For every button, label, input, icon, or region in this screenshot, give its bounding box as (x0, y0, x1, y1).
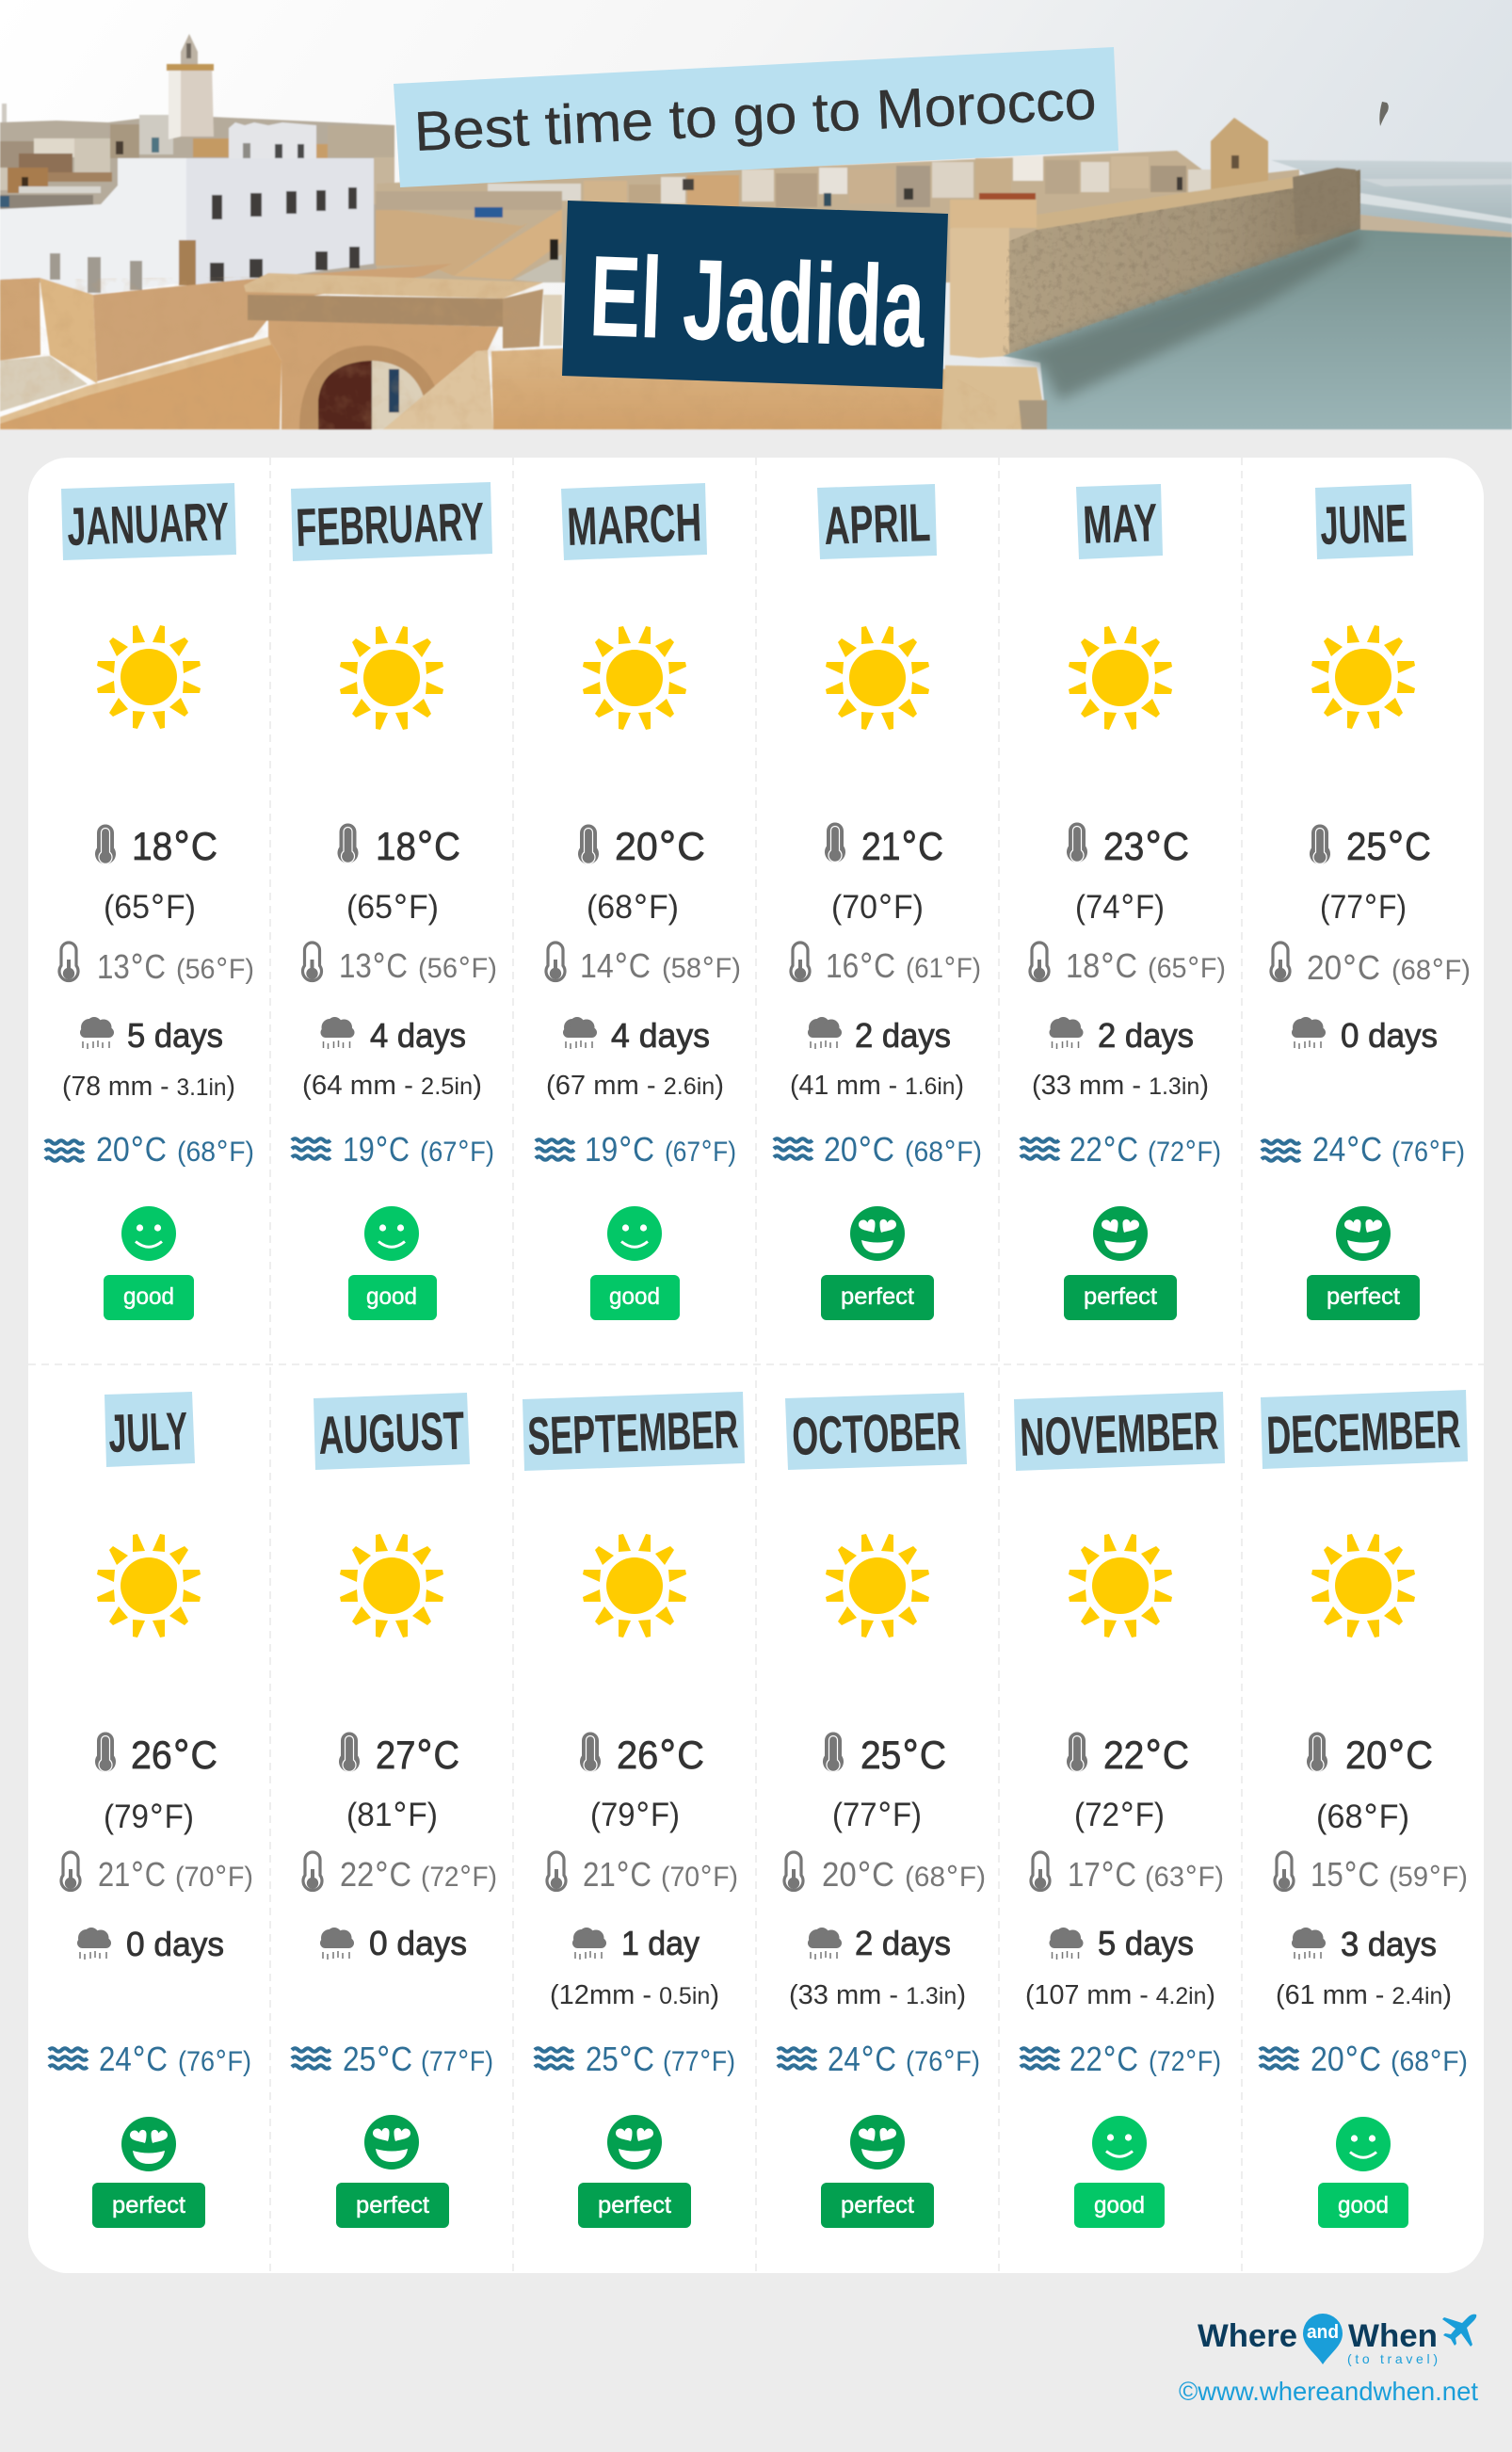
sea temperature: 22°C (1070, 1130, 1138, 1170)
rain days: 3 days (1341, 1925, 1437, 1963)
low temperature: 13°C (97, 947, 166, 987)
low temperature: 18°C (1066, 946, 1137, 986)
rating badge: perfect (598, 2192, 671, 2218)
column: June (1262, 484, 1471, 1320)
rating badge: perfect (841, 2192, 914, 2218)
column: March (536, 483, 741, 1320)
high temperature: 20°C (615, 823, 705, 869)
rain days: 0 days (126, 1925, 224, 1963)
rating badge: perfect (112, 2192, 185, 2218)
high temperature: 26°C (131, 1732, 217, 1778)
rainfall: (33 mm - 1.3in) (1032, 1071, 1209, 1101)
header photo: El Jadida fortress and sea (0, 0, 1512, 429)
icon: sun (1069, 1534, 1172, 1637)
low fahrenheit: (65°F) (1148, 952, 1226, 985)
rainfall: (12mm - 0.5in) (550, 1980, 719, 2010)
month label (105, 1392, 195, 1467)
low fahrenheit: (70°F) (175, 1861, 253, 1894)
icon: thermometer high (1307, 1733, 1327, 1772)
month label (523, 1392, 745, 1471)
month label: NOVEMBER (1019, 1401, 1219, 1468)
icon: thermometer high (1067, 823, 1087, 863)
sea fahrenheit: (76°F) (906, 2045, 980, 2078)
icon: sun (826, 1534, 929, 1637)
high temperature: 18°C (376, 823, 460, 869)
rain days: 1 day (621, 1924, 700, 1962)
icon: waves (535, 2048, 573, 2069)
icon: rain cloud (1292, 1017, 1326, 1049)
icon: sun (1069, 626, 1172, 730)
month label (1014, 1392, 1225, 1471)
icon: sun (97, 1534, 201, 1637)
column: December (1260, 1390, 1468, 2228)
month label: MAY (1082, 492, 1158, 556)
column: October (778, 1393, 986, 2228)
month label (817, 484, 937, 559)
icon: thermometer low (1275, 1852, 1294, 1891)
rainfall: (78 mm - 3.1in) (62, 1072, 235, 1102)
icon: thermometer high (825, 823, 845, 863)
high temperature: 26°C (617, 1732, 704, 1778)
icon: waves (292, 2048, 330, 2069)
sea temperature: 24°C (1312, 1130, 1382, 1170)
rain days: 2 days (855, 1016, 951, 1055)
low fahrenheit: (68°F) (1391, 954, 1471, 987)
icon: waves (45, 1140, 84, 1161)
low fahrenheit: (63°F) (1145, 1861, 1224, 1894)
icon: sun (826, 626, 929, 730)
icon: rain cloud (572, 1928, 606, 1960)
icon: waves (774, 1138, 812, 1159)
month label: SEPTEMBER (526, 1399, 739, 1467)
low fahrenheit: (72°F) (421, 1861, 497, 1894)
sea fahrenheit: (67°F) (665, 1136, 736, 1169)
icon: waves (778, 2048, 816, 2069)
sea temperature: 24°C (99, 2040, 168, 2079)
low fahrenheit: (59°F) (1389, 1861, 1468, 1894)
icon: thermometer high (95, 825, 116, 864)
high temperature: 27°C (376, 1732, 459, 1778)
icon: thermometer low (547, 1852, 566, 1891)
rating badge (821, 1275, 934, 1320)
high temperature: 23°C (1103, 823, 1189, 869)
month label: APRIL (823, 492, 931, 557)
rating badge: perfect (356, 2192, 429, 2218)
sea fahrenheit: (76°F) (178, 2045, 251, 2078)
low fahrenheit: (56°F) (176, 953, 254, 986)
icon: good smiley (607, 1206, 662, 1261)
high temperature fahrenheit: (68°F) (587, 889, 679, 927)
rainfall: (107 mm - 4.2in) (1025, 1980, 1215, 2010)
icon: rain cloud (77, 1928, 111, 1960)
month label (785, 1393, 967, 1470)
low fahrenheit: (56°F) (418, 952, 497, 985)
sea fahrenheit: (76°F) (1391, 1136, 1465, 1169)
high temperature fahrenheit: (77°F) (1320, 889, 1407, 927)
icon: thermometer low (1271, 943, 1290, 981)
month label: AUGUST (317, 1401, 465, 1466)
icon: map pin (1303, 2314, 1343, 2364)
icon: perfect smiley (850, 1206, 905, 1261)
high temperature fahrenheit: (79°F) (104, 1799, 194, 1836)
month label (61, 483, 236, 560)
rating badge (1318, 2183, 1408, 2228)
icon: thermometer low (546, 943, 565, 981)
icon: rain cloud (1049, 1017, 1083, 1049)
icon: waves (536, 1139, 574, 1160)
low fahrenheit: (58°F) (662, 952, 741, 985)
rating badge (336, 2183, 449, 2228)
icon: thermometer low (303, 1852, 322, 1891)
icon: thermometer high (823, 1733, 844, 1772)
rain days: 4 days (370, 1016, 466, 1055)
rain days: 5 days (127, 1016, 223, 1055)
icon: sun (1311, 1534, 1415, 1637)
title text: El Jadida (587, 232, 927, 371)
icon: plane (1442, 2315, 1476, 2347)
low temperature: 15°C (1311, 1855, 1379, 1895)
photo texture: stone (1003, 169, 1360, 356)
icon: waves (292, 1138, 330, 1159)
icon: rain cloud (563, 1017, 597, 1049)
rating badge: good (1338, 2192, 1389, 2218)
column: May (1021, 484, 1226, 1320)
sea temperature: 25°C (343, 2040, 412, 2079)
month label: JANUARY (66, 492, 230, 557)
subtitle banner (394, 47, 1118, 187)
footer logo: Where and When (1198, 2314, 1476, 2366)
photo texture: plaster (0, 276, 1047, 429)
month label (1076, 484, 1163, 559)
icon: rain cloud (1292, 1928, 1326, 1960)
high temperature fahrenheit: (70°F) (831, 889, 924, 927)
icon: rain cloud (808, 1928, 842, 1960)
rating badge: good (123, 1283, 174, 1310)
icon: waves (1262, 1140, 1300, 1161)
high temperature: 25°C (1346, 823, 1431, 869)
rating badge (348, 1275, 437, 1320)
icon: sun (340, 1534, 443, 1637)
rating badge (821, 2183, 934, 2228)
high temperature: 21°C (861, 823, 943, 869)
sea fahrenheit: (77°F) (421, 2045, 493, 2078)
icon: rain cloud (808, 1017, 842, 1049)
sea fahrenheit: (67°F) (420, 1136, 494, 1169)
sea temperature: 24°C (828, 2040, 896, 2079)
month label: MARCH (566, 492, 702, 557)
icon: good smiley (121, 1206, 176, 1261)
high temperature fahrenheit: (65°F) (346, 889, 439, 927)
icon: rain cloud (80, 1017, 114, 1049)
icon: thermometer high (580, 1733, 601, 1772)
icon: waves (49, 2048, 88, 2069)
icon: perfect smiley (121, 2117, 176, 2171)
icon: thermometer high (339, 1733, 360, 1772)
low temperature: 17°C (1068, 1855, 1136, 1895)
high temperature: 25°C (861, 1732, 946, 1778)
rating badge (1074, 2183, 1165, 2228)
sea fahrenheit: (72°F) (1148, 1136, 1221, 1169)
icon: good smiley (1336, 2117, 1391, 2171)
icon: thermometer low (1031, 1852, 1050, 1891)
rating badge: good (1094, 2192, 1145, 2218)
rainfall: (33 mm - 1.3in) (789, 1980, 966, 2010)
footer logo: Where and When: Where (1198, 2318, 1297, 2354)
low temperature: 22°C (340, 1855, 411, 1895)
icon: thermometer high (1067, 1733, 1087, 1772)
rating badge (1307, 1275, 1420, 1320)
month label: JULY (107, 1401, 188, 1464)
icon: rain cloud (320, 1928, 354, 1960)
rating badge: perfect (1084, 1283, 1157, 1310)
low temperature: 21°C (98, 1855, 166, 1895)
month label: OCTOBER (791, 1401, 961, 1467)
column: February (291, 482, 497, 1320)
icon: map pin: and (1307, 2322, 1339, 2343)
low temperature: 16°C (826, 946, 895, 986)
low fahrenheit: (70°F) (661, 1861, 738, 1894)
icon: waves (1021, 2048, 1059, 2069)
month label (561, 483, 707, 560)
low fahrenheit: (61°F) (906, 952, 981, 985)
high temperature: 22°C (1103, 1732, 1189, 1778)
icon: thermometer low (303, 943, 322, 981)
icon: thermometer low (61, 1852, 80, 1891)
icon: sun (583, 626, 686, 730)
low temperature: 20°C (1307, 948, 1380, 988)
month label (314, 1393, 470, 1470)
rainfall: (41 mm - 1.6in) (790, 1071, 964, 1101)
icon: thermometer high (337, 823, 358, 863)
icon: sun (1311, 625, 1415, 729)
icon: thermometer high (95, 1733, 116, 1772)
month label: FEBRUARY (295, 492, 485, 558)
icon: perfect smiley (850, 2115, 905, 2170)
icon: sun (583, 1534, 686, 1637)
sea fahrenheit: (68°F) (177, 1136, 254, 1169)
sea fahrenheit: (68°F) (1391, 2045, 1468, 2078)
icon: thermometer high (1310, 825, 1330, 864)
column: July (49, 1392, 253, 2228)
rain days: 0 days (1341, 1016, 1438, 1055)
icon: sun (340, 626, 443, 730)
icon: perfect smiley (1336, 1206, 1391, 1261)
rating badge (104, 1275, 194, 1320)
icon: waves (1260, 2048, 1298, 2069)
low temperature: 14°C (580, 946, 651, 986)
icon: thermometer high (578, 825, 599, 864)
icon: thermometer low (59, 943, 78, 981)
rating badge (92, 2183, 205, 2228)
rating badge (1064, 1275, 1177, 1320)
icon: thermometer low (791, 943, 810, 981)
icon: perfect smiley (364, 2115, 419, 2170)
sea temperature: 19°C (343, 1130, 410, 1170)
column: August (292, 1393, 497, 2228)
rain days: 2 days (855, 1924, 951, 1962)
icon: thermometer low (784, 1852, 803, 1891)
sea temperature: 25°C (586, 2040, 654, 2079)
high temperature fahrenheit: (65°F) (104, 889, 196, 927)
logo word: When: When (1348, 2318, 1438, 2354)
icon: seagull (1379, 102, 1389, 126)
sea temperature: 20°C (824, 1130, 894, 1170)
rating badge: perfect (841, 1283, 914, 1310)
sea fahrenheit: (72°F) (1149, 2045, 1221, 2078)
high temperature fahrenheit: (79°F) (590, 1797, 680, 1834)
month label (1315, 484, 1413, 559)
column: November (1014, 1392, 1225, 2228)
low temperature: 21°C (583, 1855, 651, 1895)
sea temperature: 19°C (585, 1130, 654, 1170)
title banner (562, 201, 948, 389)
rating badge (590, 1275, 680, 1320)
high temperature: 20°C (1345, 1732, 1433, 1778)
icon: good smiley (1092, 2116, 1147, 2170)
rain days: 4 days (611, 1016, 710, 1055)
column: September (523, 1392, 745, 2228)
high temperature fahrenheit: (77°F) (832, 1797, 922, 1834)
icon: rain cloud (1049, 1928, 1083, 1960)
low fahrenheit: (68°F) (905, 1861, 986, 1894)
low temperature: 20°C (822, 1855, 894, 1895)
low temperature: 13°C (339, 946, 408, 986)
sea temperature: 20°C (96, 1130, 167, 1170)
icon: good smiley (364, 1206, 419, 1261)
high temperature fahrenheit: (72°F) (1074, 1797, 1165, 1834)
rating badge: good (609, 1283, 660, 1310)
column: April (774, 484, 982, 1320)
high temperature fahrenheit: (81°F) (346, 1797, 438, 1834)
sea fahrenheit: (68°F) (905, 1136, 982, 1169)
website credit: ©www.whereandwhen.net (1179, 2377, 1478, 2406)
icon: waves (1021, 1138, 1059, 1159)
subtitle text: Best time to go to Morocco (413, 69, 1098, 163)
icon: sun (97, 625, 201, 729)
rainfall: (67 mm - 2.6in) (546, 1071, 724, 1101)
panel: monthly climate table (28, 458, 1484, 2273)
icon: perfect smiley (1093, 1206, 1148, 1261)
rating badge: good (366, 1283, 417, 1310)
icon: perfect smiley (607, 2115, 662, 2170)
sea temperature: 20°C (1311, 2040, 1381, 2079)
icon: rain cloud (320, 1017, 354, 1049)
logo tagline: (to travel) (1347, 2351, 1438, 2366)
month label (291, 482, 492, 561)
high temperature fahrenheit: (74°F) (1075, 889, 1165, 927)
month label: JUNE (1319, 493, 1407, 557)
rating badge (578, 2183, 691, 2228)
sea temperature: 22°C (1070, 2040, 1138, 2079)
rainfall: (64 mm - 2.5in) (302, 1071, 482, 1101)
icon: thermometer low (1030, 943, 1049, 981)
rain days: 5 days (1098, 1924, 1194, 1962)
rating badge: perfect (1327, 1283, 1400, 1310)
rain days: 2 days (1098, 1016, 1194, 1055)
rain days: 0 days (369, 1924, 467, 1962)
high temperature: 18°C (132, 823, 217, 869)
sea fahrenheit: (77°F) (663, 2045, 735, 2078)
rainfall: (61 mm - 2.4in) (1276, 1980, 1452, 2010)
high temperature fahrenheit: (68°F) (1316, 1799, 1409, 1836)
column: January (45, 483, 254, 1320)
